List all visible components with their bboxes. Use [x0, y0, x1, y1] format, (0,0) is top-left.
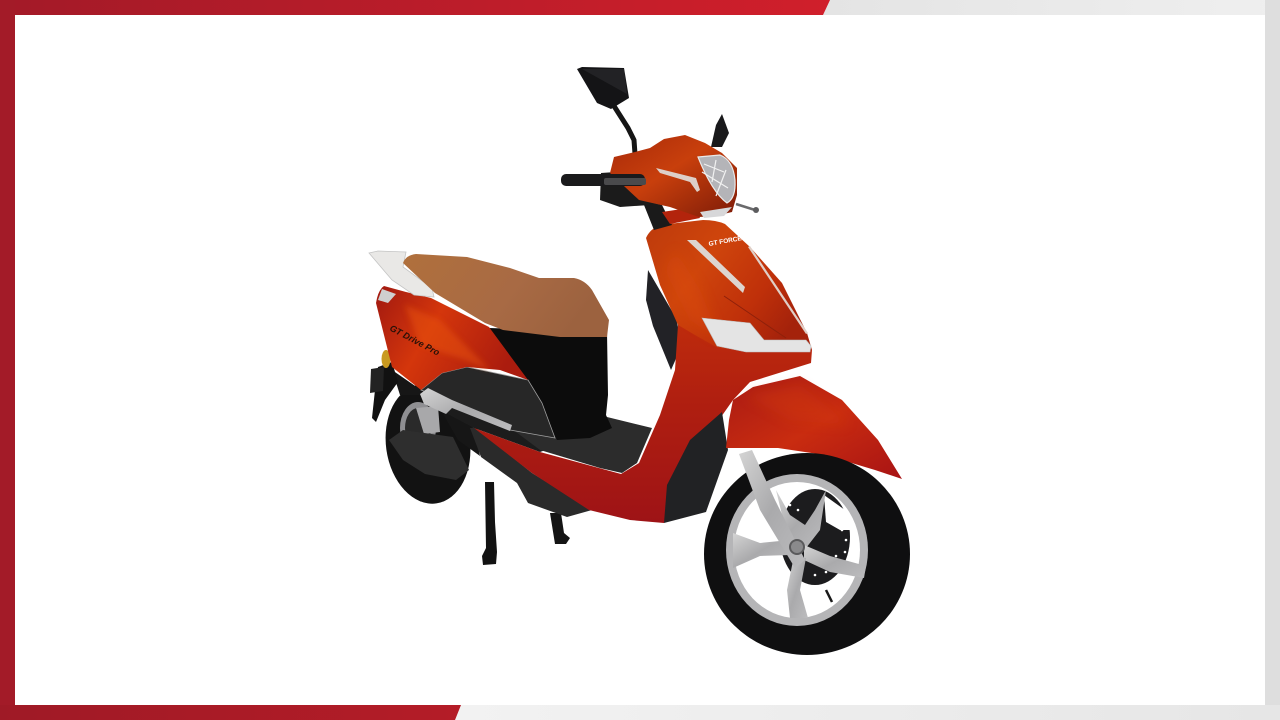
- frame: right grey bar: [1265, 0, 1280, 720]
- model name on rear panel: GT Drive Pro: [388, 323, 442, 358]
- lower headlight trim: [700, 207, 732, 218]
- main red body lower: [474, 318, 812, 523]
- front wheel: [704, 450, 910, 655]
- spokes: [733, 490, 866, 618]
- front fork: [739, 450, 805, 568]
- silver tail detail: [378, 289, 396, 303]
- frame: bottom red bar: [0, 705, 461, 720]
- silver side trim: [420, 388, 512, 431]
- frame: top grey bar: [820, 0, 1280, 15]
- seat: [403, 254, 609, 337]
- rear mudflap and plate bracket: [370, 350, 398, 422]
- rear grab rail: [369, 251, 434, 297]
- headlight: [698, 155, 735, 203]
- front indicator light: [702, 318, 811, 352]
- side stand: [550, 513, 570, 544]
- frame: bottom grey bar: [450, 705, 1280, 720]
- handlebar switchgear: [600, 170, 650, 207]
- right mirror: [711, 114, 729, 147]
- rear shock: [416, 406, 440, 434]
- white gaps: [824, 495, 853, 530]
- centre black panel: [489, 328, 612, 440]
- left mirror: [577, 67, 635, 154]
- frame: left red bar: [0, 0, 15, 720]
- underbody: [470, 428, 592, 517]
- rear frame: [392, 370, 480, 456]
- cowl chrome strip: [656, 168, 700, 192]
- tyre: [704, 453, 910, 655]
- scooter: [369, 67, 910, 655]
- shield silver stripes: [687, 240, 808, 338]
- handlebar grip: [561, 174, 646, 186]
- motor cover: [389, 430, 469, 480]
- steering neck: [642, 200, 672, 230]
- dark band above floor: [440, 403, 560, 452]
- kickstand centre: [482, 482, 497, 565]
- valve stem: [826, 590, 832, 602]
- head cowl: [610, 135, 737, 217]
- front fender: [726, 376, 902, 479]
- inner shield black: [646, 270, 682, 370]
- brand logo on shield: GT FORCE: [708, 235, 743, 248]
- front shield: [646, 220, 812, 352]
- floor mat: [500, 417, 652, 473]
- frame: top red bar: [0, 0, 830, 15]
- brake disc: [780, 489, 850, 585]
- disc holes: [789, 504, 847, 576]
- hub: [790, 540, 804, 554]
- dark inner fender: [664, 412, 728, 523]
- rear red panel: [376, 286, 528, 390]
- side dark panel: [421, 367, 555, 438]
- rear wheel: [378, 370, 480, 509]
- right lever: [736, 204, 759, 213]
- rim: [726, 474, 868, 626]
